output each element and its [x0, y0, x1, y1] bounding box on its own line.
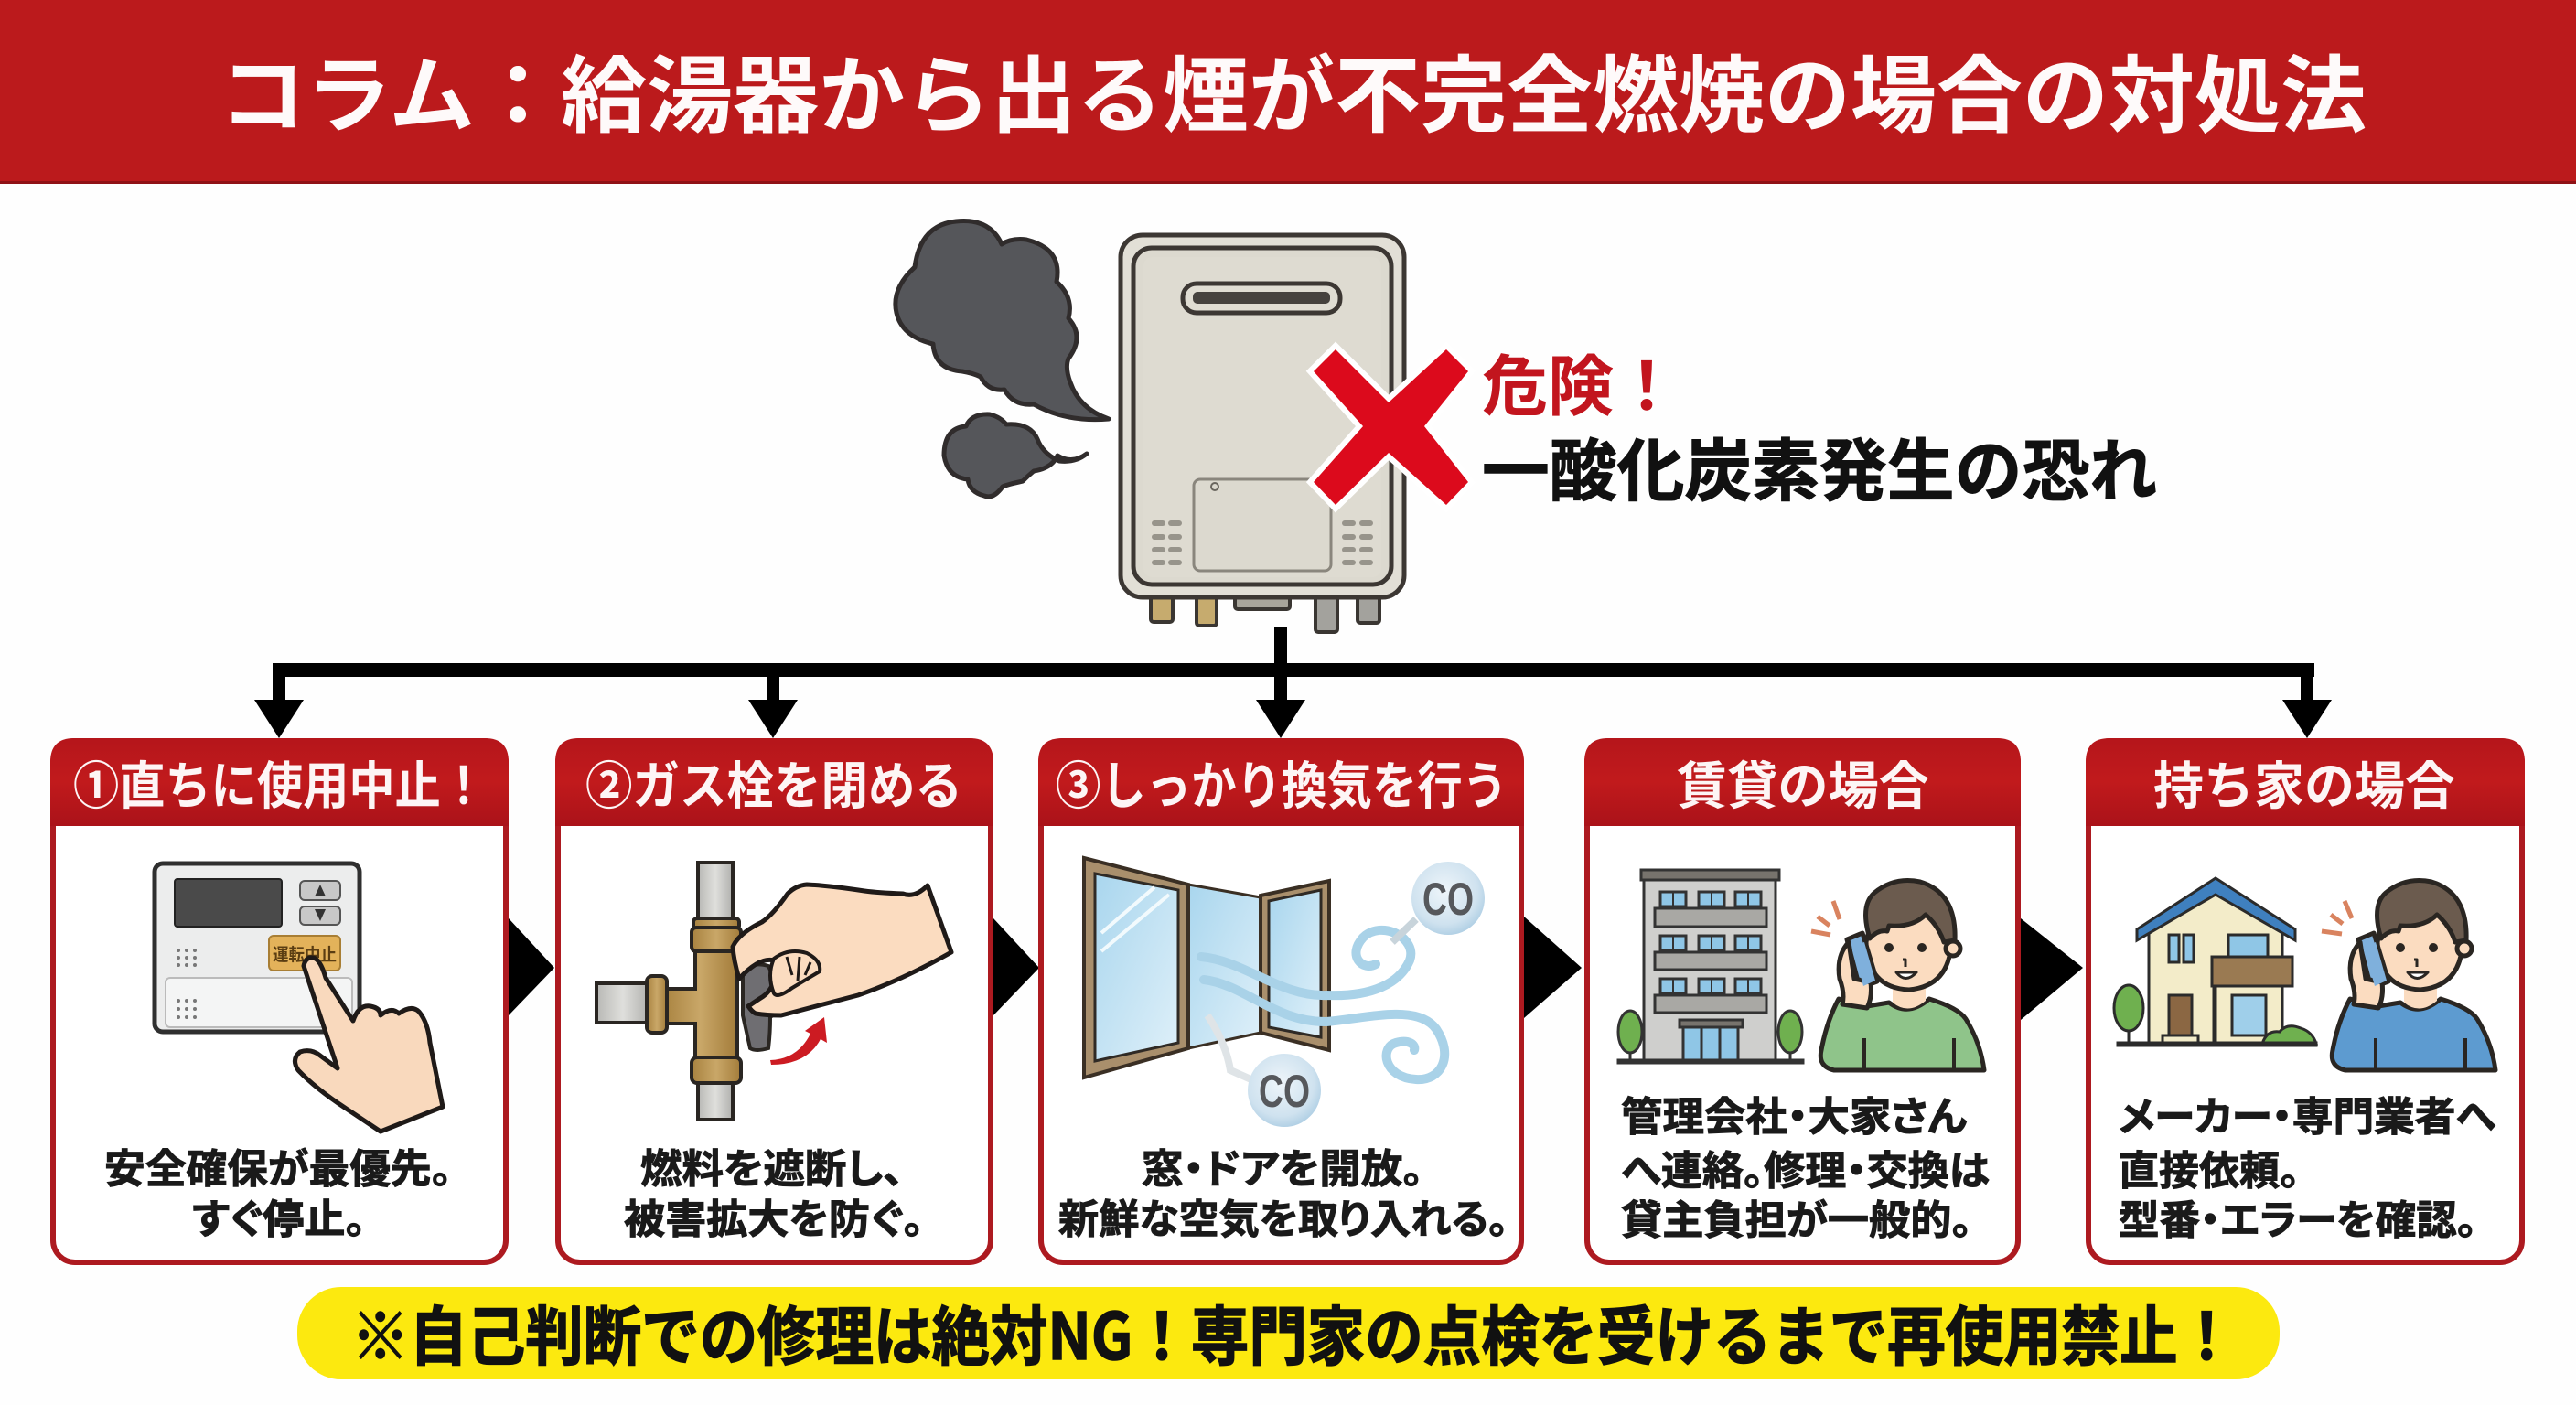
icon: red X	[1314, 349, 1468, 505]
body text: 窓・ドアを開放。	[1142, 1136, 1423, 1195]
icon: person on phone	[2332, 880, 2496, 1070]
panel: step 2 close gas valve	[555, 738, 993, 1262]
panel: step 3 ventilate: 新鮮な空気を取り入れる。	[1058, 1186, 1508, 1245]
louvres	[1152, 520, 1373, 565]
icon: gripping hand	[733, 885, 951, 1015]
body text: 安全確保が最優先。	[104, 1136, 452, 1195]
panel: owned home	[2086, 738, 2525, 1262]
warning banner	[297, 1286, 2280, 1379]
icon: remote controller: 運転中止	[273, 941, 337, 966]
vent	[1183, 284, 1340, 313]
icon: person on phone	[1820, 880, 1984, 1070]
carbon monoxide warning: 一酸化炭素発生の恐れ	[1482, 417, 2157, 515]
body text: 管理会社・大家さん	[1621, 1084, 1967, 1142]
heading: 持ち家の場合	[2153, 745, 2455, 820]
panel: rental	[1584, 738, 2021, 1262]
icon: remote controller	[155, 863, 360, 1032]
heading: ①直ちに使用中止！	[73, 745, 487, 820]
icon: signal ticks	[2322, 901, 2352, 934]
pipes	[1151, 595, 1379, 632]
icon: smoke clouds	[896, 221, 1109, 497]
icon: smoke wisps	[1208, 1015, 1255, 1081]
body text: メーカー・専門業者へ	[2119, 1084, 2496, 1142]
warning text	[1482, 333, 2157, 515]
panel: step 1 stop using	[50, 738, 509, 1262]
panel: owned home: 型番・エラーを確認。	[2119, 1187, 2477, 1246]
icon: apartment building	[1618, 870, 1803, 1063]
icon: CO bubble upper: CO	[1422, 874, 1474, 925]
access panel	[1194, 479, 1331, 571]
body text: 燃料を遮断し、	[640, 1136, 904, 1195]
title banner	[0, 0, 2576, 184]
icon: wind swirls	[1201, 930, 1444, 1079]
danger heading: 危険！	[1482, 333, 1680, 429]
icon: CO bubble upper	[1411, 862, 1485, 935]
icon: water heater	[1121, 235, 1404, 632]
chevron arrows between cards	[509, 917, 2083, 1020]
heading: ②ガス栓を閉める	[585, 745, 962, 820]
fingers	[770, 951, 820, 995]
icon: red rotation arrow	[770, 1017, 827, 1065]
icon: house	[2114, 878, 2316, 1046]
panel: step 3 ventilate	[1038, 738, 1524, 1262]
icon: open window	[1084, 858, 1329, 1078]
panel: step 2 close gas valve: 被害拡大を防ぐ。	[624, 1186, 924, 1245]
icon: CO bubble lower: CO	[1259, 1066, 1310, 1117]
heading: ③しっかり換気を行う	[1056, 745, 1508, 820]
flow arrows	[254, 627, 2332, 738]
panel: rental: 貸主負担が一般的。	[1621, 1187, 1972, 1246]
icon: gas valve	[596, 863, 741, 1120]
icon: signal ticks	[1811, 901, 1840, 935]
icon: valve handle	[743, 964, 787, 1050]
icon: CO bubble lower	[1248, 1054, 1321, 1127]
heading: 賃貸の場合	[1677, 745, 1929, 820]
icon: pointing hand	[295, 958, 443, 1132]
panel: owned home: 直接依頼。	[2119, 1138, 2300, 1196]
title: コラム：給湯器から出る煙が不完全燃焼の場合の対処法	[220, 28, 2367, 150]
banner text: ※自己判断での修理は絶対NG！専門家の点検を受けるまで再使用禁止！	[351, 1286, 2236, 1378]
panel: rental: へ連絡。修理・交換は	[1621, 1138, 1990, 1196]
panel: step 1 stop using: すぐ停止。	[192, 1186, 366, 1245]
